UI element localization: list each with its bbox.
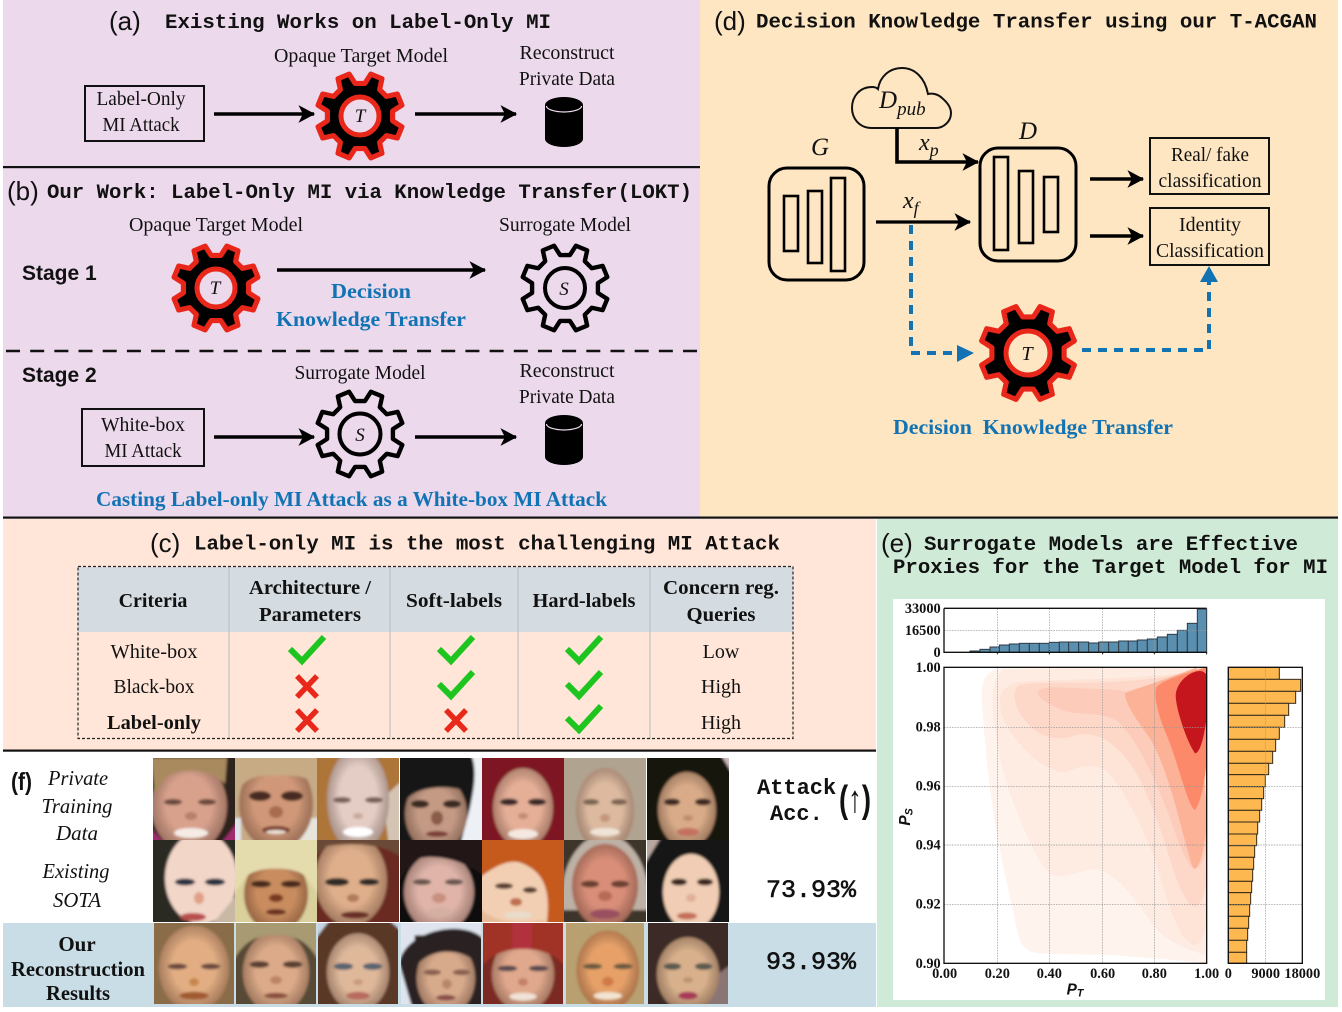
top histogram: 16500 [905,623,941,639]
row: label-only: Label-only [107,712,201,734]
label: D: D [1018,118,1037,145]
row labels: Data [55,821,98,845]
value: our accuracy: 93.93% [766,948,857,977]
row labels: Results [46,981,110,1005]
table header: Parameters [259,604,361,626]
box: label-only MI attack: Label-Only [96,88,186,110]
face grid: our reconstruction results [148,918,734,1012]
attack accuracy header: (↑) [839,779,871,821]
text: casting label-only as white-box: Casting Label-only MI Attack as a White-box MI Attack [96,487,607,511]
panel: c background [3,519,876,750]
joint plot [897,601,1320,1000]
icon: database [545,97,583,147]
panel: b our work [6,176,697,511]
text: decision knowledge transfer: Knowledge Transfer [276,307,466,331]
label: xf: f [914,198,922,218]
panel: f reconstruction comparison [11,748,871,1012]
density plot: 0.20 [985,966,1010,982]
density plot: P [1067,981,1077,998]
label: reconstruct private data: Reconstruct [520,360,615,382]
text: decision knowledge transfer: Decision [331,279,411,303]
arrow: surrogate to data [415,435,516,439]
box: label-only MI attack [85,86,204,141]
label: reconstruct private data: Reconstruct [520,42,615,64]
box: identity classification: Classification [1156,240,1264,262]
icon: target model gear [318,74,402,158]
density plot: 0.40 [1037,966,1062,982]
right histogram: 0 [1225,966,1232,982]
top histogram: 33000 [905,601,941,617]
row labels: Training [42,794,112,818]
heading a: Existing Works on Label-Only MI [165,12,551,35]
icon: target gear: T [1021,343,1034,365]
table header: Concern reg. [663,577,779,599]
row labels: (f) [11,768,32,796]
arrow: target to data [415,112,516,116]
heading b: Our Work: Label-Only MI via Knowledge Transfer(LOKT) [47,182,692,205]
density plot: 0.96 [916,779,941,795]
row: label-only: High [701,712,741,734]
row: white-box: Low [703,641,740,663]
density plot: 1.00 [916,660,941,676]
label: xf: x [903,188,914,214]
table header: Soft-labels [406,590,502,612]
heading c: Label-only MI is the most challenging MI Attack [194,534,780,556]
face grid: existing SOTA [147,832,735,932]
generator [769,168,864,280]
density plot: 0.98 [916,719,941,735]
panel: a and b background [3,0,700,517]
density plot: 0.92 [916,897,941,913]
icon: public data cloud [852,68,951,128]
heading a: (a) [109,6,141,36]
top histogram [905,601,1207,661]
row labels: Existing [42,859,109,883]
label: opaque target model: Opaque Target Model [274,45,448,67]
arrow: attack to target [214,112,314,116]
density plot: T [1077,988,1085,1000]
density plot: 0.90 [916,956,941,972]
arrow: dashed blue to target [911,225,974,362]
panel: d T-ACGAN [714,6,1317,439]
panel: c comparison table [78,528,793,739]
right histogram [1225,667,1320,982]
label: surrogate model: Surrogate Model [499,214,631,236]
row: white-box: White-box [110,641,198,663]
table header [119,577,779,626]
panel: e background [877,519,1338,1007]
label: surrogate model: Surrogate Model [294,362,426,384]
icon: public data cloud: pub [895,99,926,120]
box: real/fake classification [1150,138,1269,194]
attack accuracy header [757,776,871,827]
density plot: 0.80 [1142,966,1167,982]
right histogram: 18000 [1284,966,1320,982]
chart panel [893,599,1325,1000]
text: decision knowledge transfer [276,279,466,331]
panel: a existing works [85,6,615,158]
icon: target gear [174,246,258,330]
table header: Architecture / [249,577,371,599]
arrow: attack to surrogate [214,435,314,439]
panel: d background [700,0,1338,517]
arrow: knowledge transfer [277,268,485,272]
row: black-box: High [701,676,741,698]
text: decision knowledge transfer: Decision Knowledge Transfer [893,415,1173,439]
row: white-box [110,637,740,663]
density plot: S [903,808,915,815]
heading d: (d) [714,6,746,36]
attack accuracy header: Acc. [770,802,823,827]
row labels: Our [58,932,96,956]
panel: f highlighted row [3,923,876,1007]
icon: public data cloud: D [879,87,897,114]
row: black-box [114,672,741,698]
label: xp: p [928,140,939,160]
density plot: 0.94 [916,837,941,853]
heading d: Decision Knowledge Transfer using our T-ACGAN [756,12,1317,34]
box: label-only MI attack: MI Attack [102,114,180,136]
discriminator [980,148,1076,261]
box: identity classification: Identity [1179,214,1241,236]
label: reconstruct private data [519,42,615,90]
heading b: (b) [7,176,39,206]
row: black-box: Black-box [114,676,194,698]
table [78,566,793,739]
icon: surrogate gear [523,246,607,330]
face grid: private training data [147,748,735,852]
row labels: SOTA [53,888,101,912]
heading e: (e) [881,528,913,558]
stage 2 label: Stage 2 [22,364,97,387]
row labels: Private [47,766,108,790]
row labels: Reconstruction [11,957,145,981]
heading e: Surrogate Models are Effective [924,534,1298,557]
label: reconstruct private data: Private Data [519,386,615,408]
box: white-box MI attack [82,409,204,466]
arrow: to real/fake [1090,177,1143,181]
label: reconstruct private data: Private Data [519,68,615,90]
box: real/fake classification: classification [1158,170,1262,192]
stage 1 label: Stage 1 [22,262,97,285]
row labels [11,766,145,1005]
right histogram: 9000 [1251,966,1280,982]
heading e: Proxies for the Target Model for MI [893,557,1328,580]
box: white-box MI attack: White-box [101,414,185,436]
panel: e surrogate proxies [881,528,1328,1000]
label: reconstruct private data [519,360,615,408]
icon: database [545,415,583,465]
icon: target gear [982,307,1074,399]
top histogram: 0 [933,645,941,661]
icon: target gear: T [210,278,222,299]
label: xp: x [919,130,930,156]
icon: surrogate gear: S [355,425,365,446]
box: white-box MI attack: MI Attack [104,440,182,462]
box: real/fake classification: Real/ fake [1171,144,1249,166]
heading e [881,528,1328,580]
density plot: 0.00 [932,966,957,982]
value: existing accuracy: 73.93% [766,876,857,905]
table header: Hard-labels [532,590,636,612]
arrow: xp [897,128,978,162]
density plot: 0.60 [1090,966,1115,982]
icon: surrogate gear: S [559,279,569,300]
heading c: (c) [150,528,180,558]
table header: Criteria [119,590,187,612]
density plot [897,660,1219,1000]
icon: target model gear: T [355,106,367,127]
density plot: P [897,815,914,826]
table header: Queries [686,604,756,626]
box: identity classification [1150,208,1269,265]
heading a [109,6,551,36]
label: G: G [811,134,829,161]
icon: surrogate gear [318,392,402,476]
label: opaque target model: Opaque Target Model [129,214,303,236]
arrow: to identity [1090,234,1143,238]
attack accuracy header: Attack [757,776,836,801]
density plot: 1.00 [1194,966,1219,982]
row: label-only [107,706,741,734]
arrow: xf [876,220,970,224]
arrow: dashed blue to identity [1082,266,1218,350]
